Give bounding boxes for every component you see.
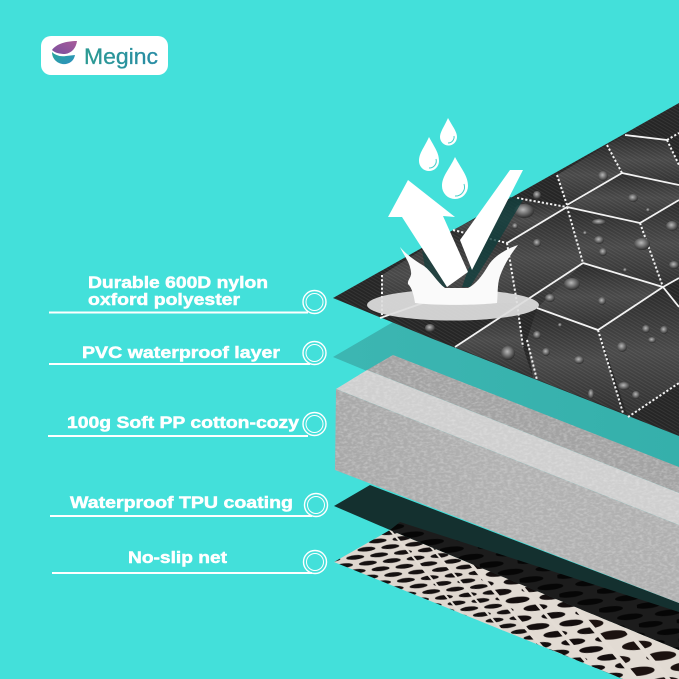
icon: water drop large — [442, 157, 468, 199]
layer: waterproof TPU coating — [334, 485, 679, 650]
stitching lines — [380, 133, 679, 417]
check mark arm — [460, 170, 523, 270]
layer: no-slip net — [334, 530, 679, 679]
fabric twill texture — [333, 103, 679, 436]
waterproof shadow on fabric — [422, 197, 523, 287]
callout: Waterproof TPU coating: Waterproof TPU coating — [70, 493, 293, 512]
net strands — [390, 530, 670, 679]
quilted panels — [380, 135, 679, 417]
splash puddle ellipse — [367, 290, 539, 320]
icon: waterproof tick, arrow, drops and splash — [367, 118, 539, 320]
callout: Waterproof TPU coating — [50, 493, 328, 516]
callout: No-slip net — [52, 548, 326, 574]
callout: Durable 600D nylon oxford polyester — [49, 273, 326, 314]
callout: PVC waterproof layer: PVC waterproof layer — [82, 343, 280, 362]
logo wordmark: Meginc — [84, 44, 158, 69]
icon: water drop medium — [419, 137, 439, 171]
cotton block front face — [335, 389, 679, 603]
water droplets — [425, 171, 679, 399]
layer: PVC waterproof layer — [333, 318, 679, 470]
callout: Durable 600D nylon oxford polyester: Durable 600D nylon — [88, 273, 268, 292]
arrow — [388, 180, 468, 287]
callout: 100g Soft PP cotton-cozy: 100g Soft PP cotton-cozy — [67, 413, 300, 432]
icon: logo leaf mark — [52, 41, 77, 64]
cotton block back strip — [367, 355, 679, 493]
logo: Meginc badge — [41, 36, 168, 75]
callout: 100g Soft PP cotton-cozy — [48, 412, 326, 436]
icon: water drop small — [440, 118, 457, 146]
layer: 600D nylon oxford fabric — [333, 103, 679, 436]
callout: PVC waterproof layer — [49, 342, 326, 364]
cotton block top face — [336, 370, 679, 525]
layer: soft PP cotton block — [335, 355, 679, 603]
callout: No-slip net: No-slip net — [128, 548, 227, 567]
callout: Durable 600D nylon oxford polyester: oxford polyester — [88, 290, 240, 309]
milk splash — [400, 245, 518, 305]
